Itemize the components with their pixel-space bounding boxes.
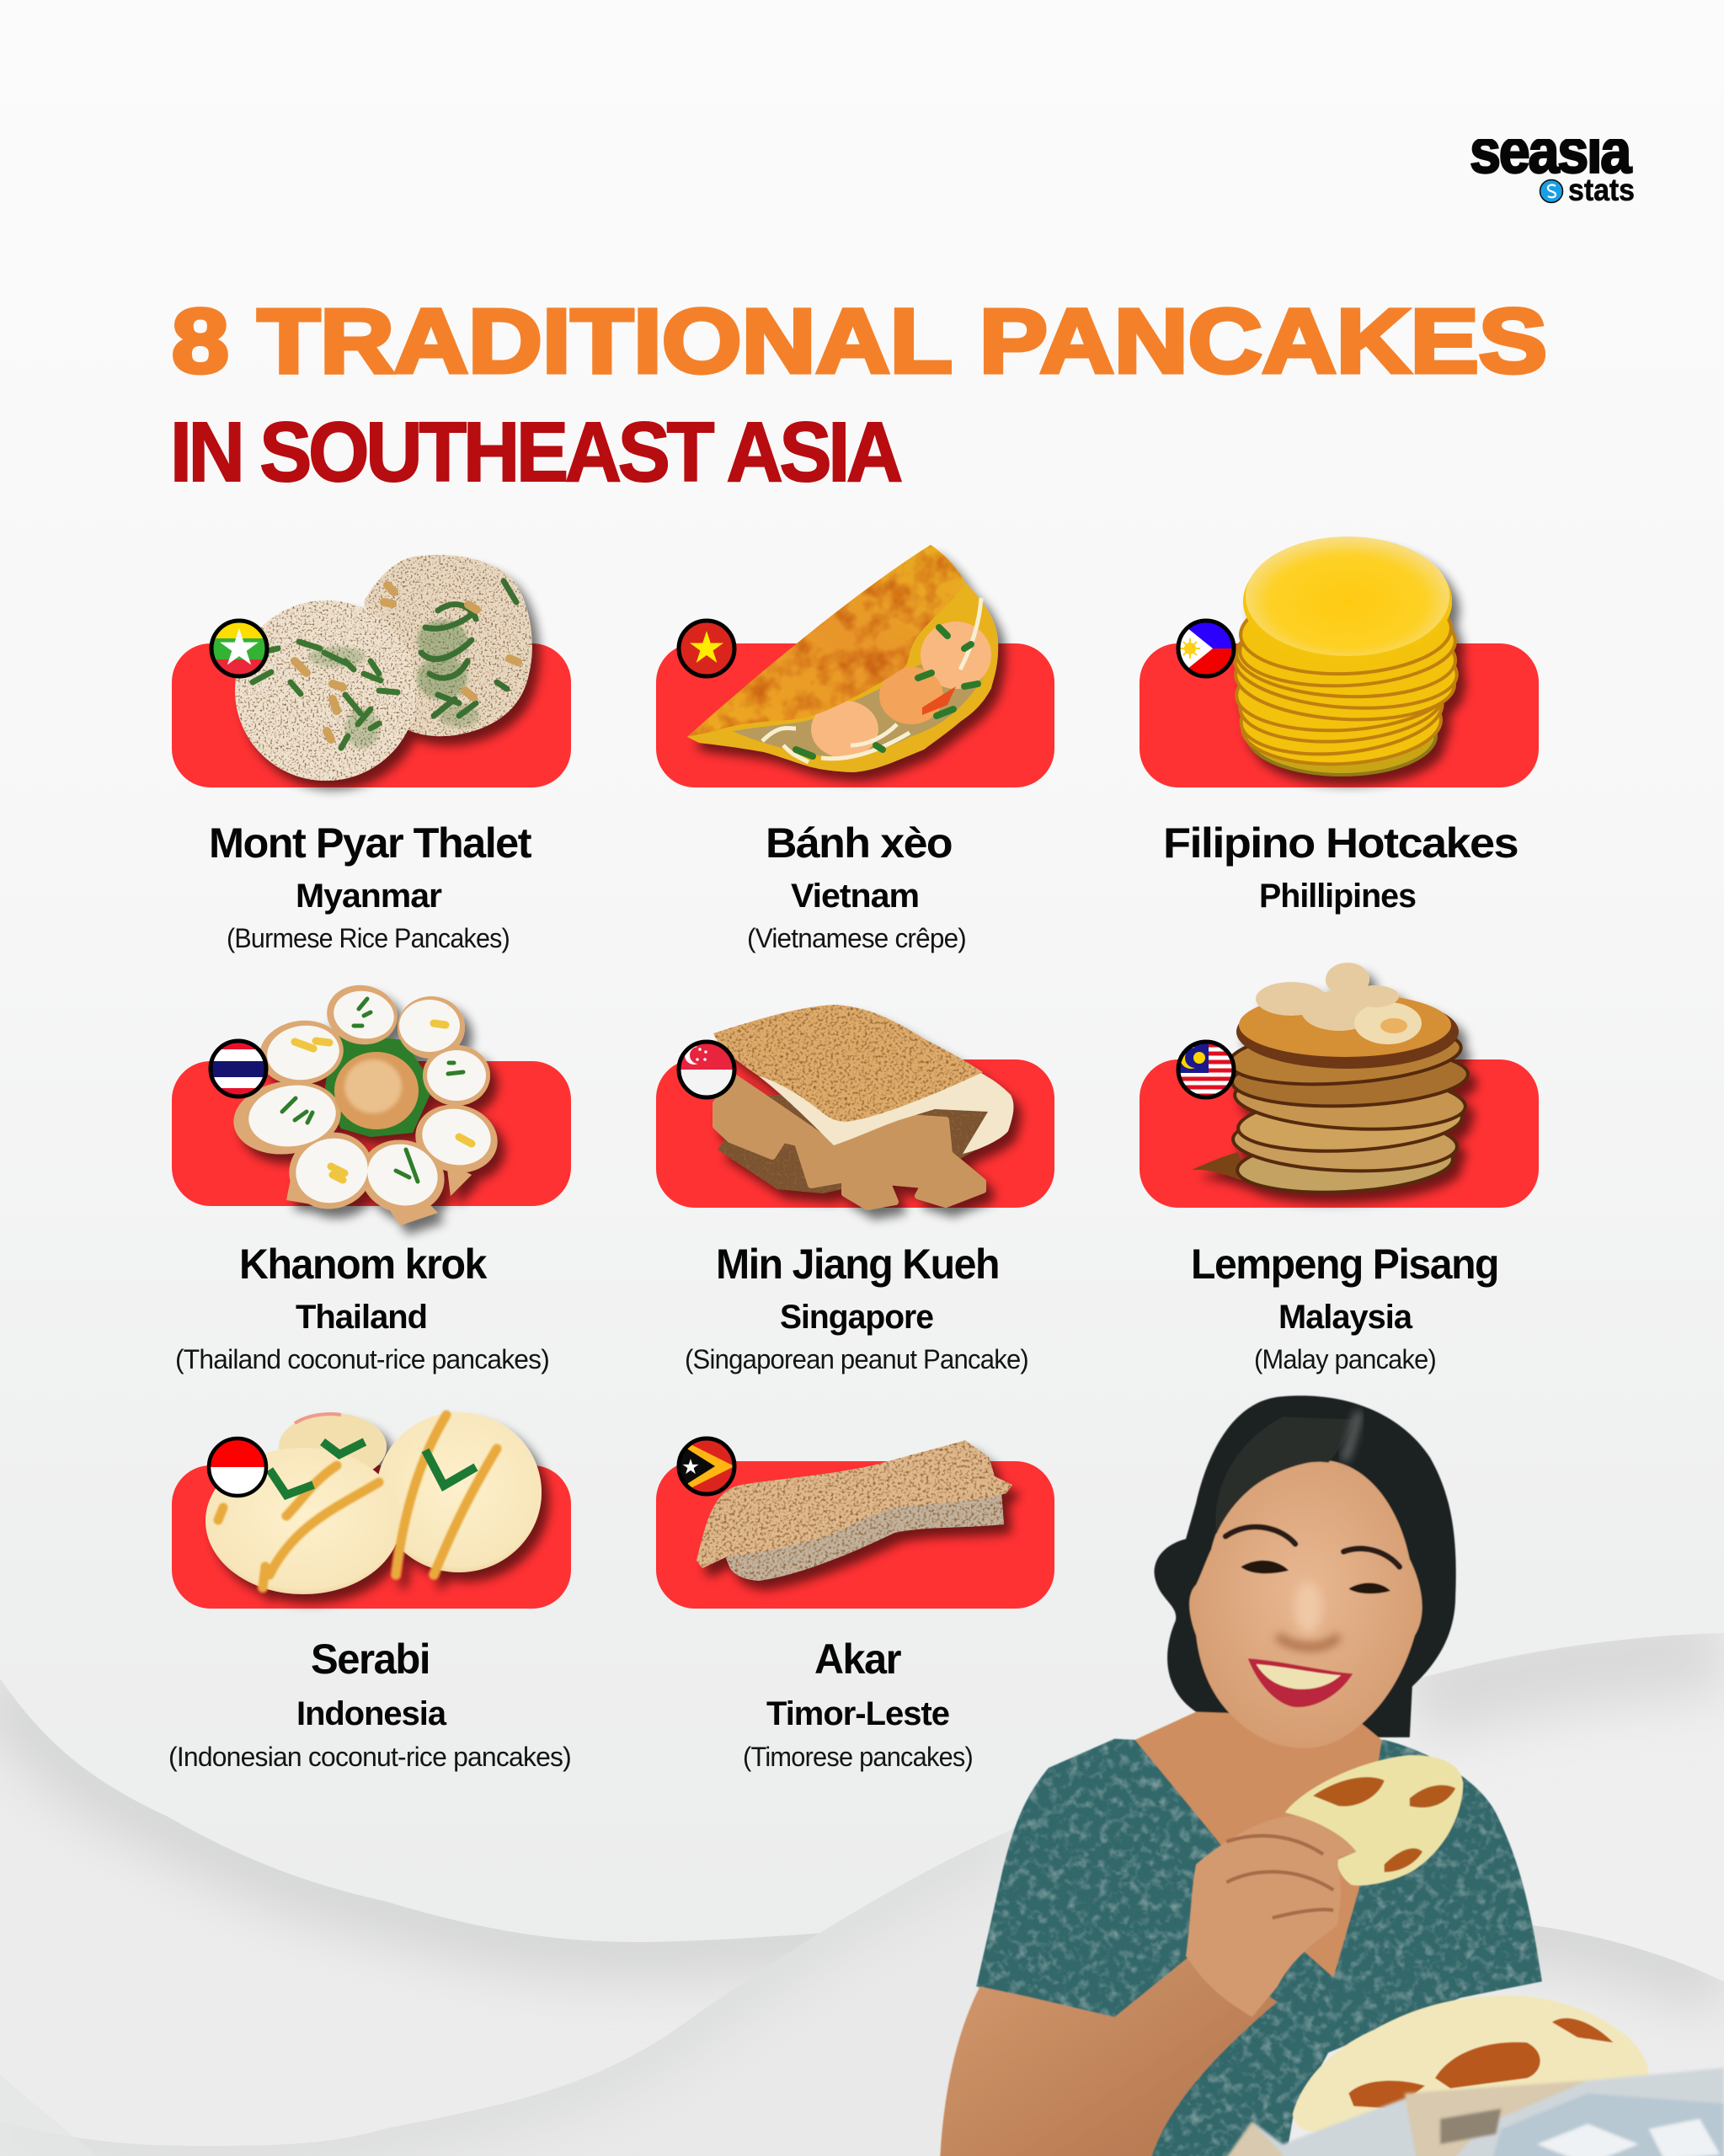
logo: seasia stats [1470, 139, 1634, 204]
lower pancake [1293, 1996, 1649, 2134]
arm [939, 1951, 1278, 2156]
panel: Lempeng Pisang [1140, 963, 1539, 1374]
food: vietnamese crepe [687, 545, 998, 772]
food name: Serabi [311, 1636, 430, 1683]
banana slices [1256, 963, 1422, 1044]
food name: Lempeng Pisang [1191, 1241, 1498, 1288]
red card [1140, 643, 1539, 787]
hair parting highlights [1215, 1417, 1353, 1534]
hair back [1155, 1396, 1456, 1737]
red card [172, 1465, 571, 1609]
country: Timor-Leste [766, 1695, 949, 1732]
red card [656, 1059, 1054, 1208]
food name: Mont Pyar Thalet [209, 819, 532, 867]
panel: Mont Pyar Thalet [172, 555, 571, 953]
food: akar roll [697, 1440, 1012, 1581]
flag: Malaysia [1178, 1042, 1234, 1097]
country: Singapore [780, 1299, 933, 1336]
neck and chest [1135, 1712, 1382, 1977]
red card [1140, 1059, 1539, 1208]
panel: Khanom krok [172, 979, 571, 1374]
country: Thailand [296, 1299, 427, 1336]
nose [1278, 1582, 1338, 1647]
red card [172, 1061, 571, 1206]
panel: Akar [656, 1438, 1054, 1772]
red card [656, 1461, 1054, 1609]
hand [1186, 1816, 1358, 2017]
subtitle: IN SOUTHEAST ASIA [170, 405, 901, 499]
flag: Indonesia [209, 1438, 266, 1496]
country: Indonesia [296, 1695, 447, 1732]
description: (Burmese Rice Pancakes) [227, 923, 510, 953]
flag: Singapore [679, 1042, 734, 1097]
food name: Filipino Hotcakes [1163, 819, 1518, 867]
food name: Khanom krok [239, 1241, 488, 1288]
description: (Malay pancake) [1254, 1344, 1436, 1374]
panel: Serabi [168, 1412, 571, 1772]
panel: Banh xeo [656, 545, 1054, 953]
panel: Filipino Hotcakes [1140, 536, 1539, 915]
food: hotcake stack [1232, 536, 1460, 775]
description: (Timorese pancakes) [743, 1742, 973, 1772]
flag: Timor-Leste [679, 1438, 734, 1494]
foil and paper in foreground [1211, 2068, 1724, 2156]
shirt [976, 1739, 1542, 2156]
country: Malaysia [1278, 1299, 1413, 1336]
description: (Thailand coconut-rice pancakes) [175, 1344, 549, 1374]
description: (Indonesian coconut-rice pancakes) [168, 1742, 571, 1772]
face [1189, 1460, 1422, 1748]
background waves [0, 1625, 1724, 2156]
food: serabi pancakes [205, 1412, 542, 1594]
description: (Singaporean peanut Pancake) [685, 1344, 1028, 1374]
country: Vietnam [791, 878, 919, 915]
panel: Min Jiang Kueh [656, 1005, 1054, 1374]
mouth [1248, 1658, 1353, 1707]
food name: Bánh xèo [766, 819, 952, 867]
logo icon [1540, 180, 1563, 202]
flag: Philippines [1172, 621, 1234, 676]
shrimp [811, 622, 991, 758]
food: coconut rice pancakes [229, 979, 504, 1225]
flag: Vietnam [679, 621, 734, 676]
logo: seasia stats: seasia [1470, 116, 1632, 186]
brows and eyes [1225, 1527, 1400, 1566]
food name: Akar [814, 1636, 901, 1683]
flag: Thailand [211, 1041, 266, 1097]
food: peanut pancake [713, 1005, 1013, 1207]
title: 8 TRADITIONAL PANCAKES [172, 290, 1547, 392]
description: (Vietnamese crêpe) [747, 923, 966, 953]
red card [656, 643, 1054, 787]
country: Myanmar [296, 878, 441, 915]
food name: Min Jiang Kueh [716, 1241, 999, 1288]
country: Phillipines [1259, 878, 1416, 915]
red card [172, 643, 571, 787]
food: burmese rice pancakes [235, 555, 532, 781]
illustration: smiling woman holding pancakes [939, 1396, 1724, 2156]
logo: seasia stats: stats [1568, 173, 1635, 207]
held pancake [1285, 1755, 1463, 1886]
flag: Myanmar [211, 621, 267, 676]
food: banana pancake stack [1192, 963, 1469, 1198]
